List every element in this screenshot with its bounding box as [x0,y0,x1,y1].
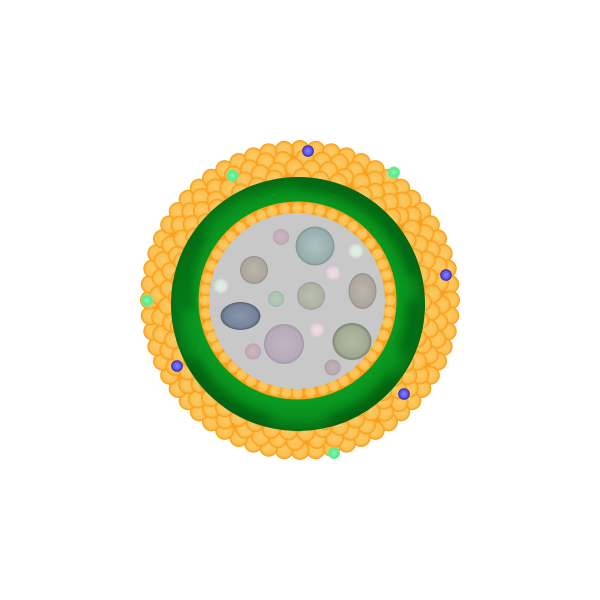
inner bead ring [190,193,405,408]
cell diagram [140,140,460,460]
outer bead layer [124,124,476,476]
organelles [213,226,376,376]
green surface proteins [141,166,400,459]
cytoplasm [209,213,385,389]
blue surface proteins [171,145,452,400]
green ring [171,177,425,431]
